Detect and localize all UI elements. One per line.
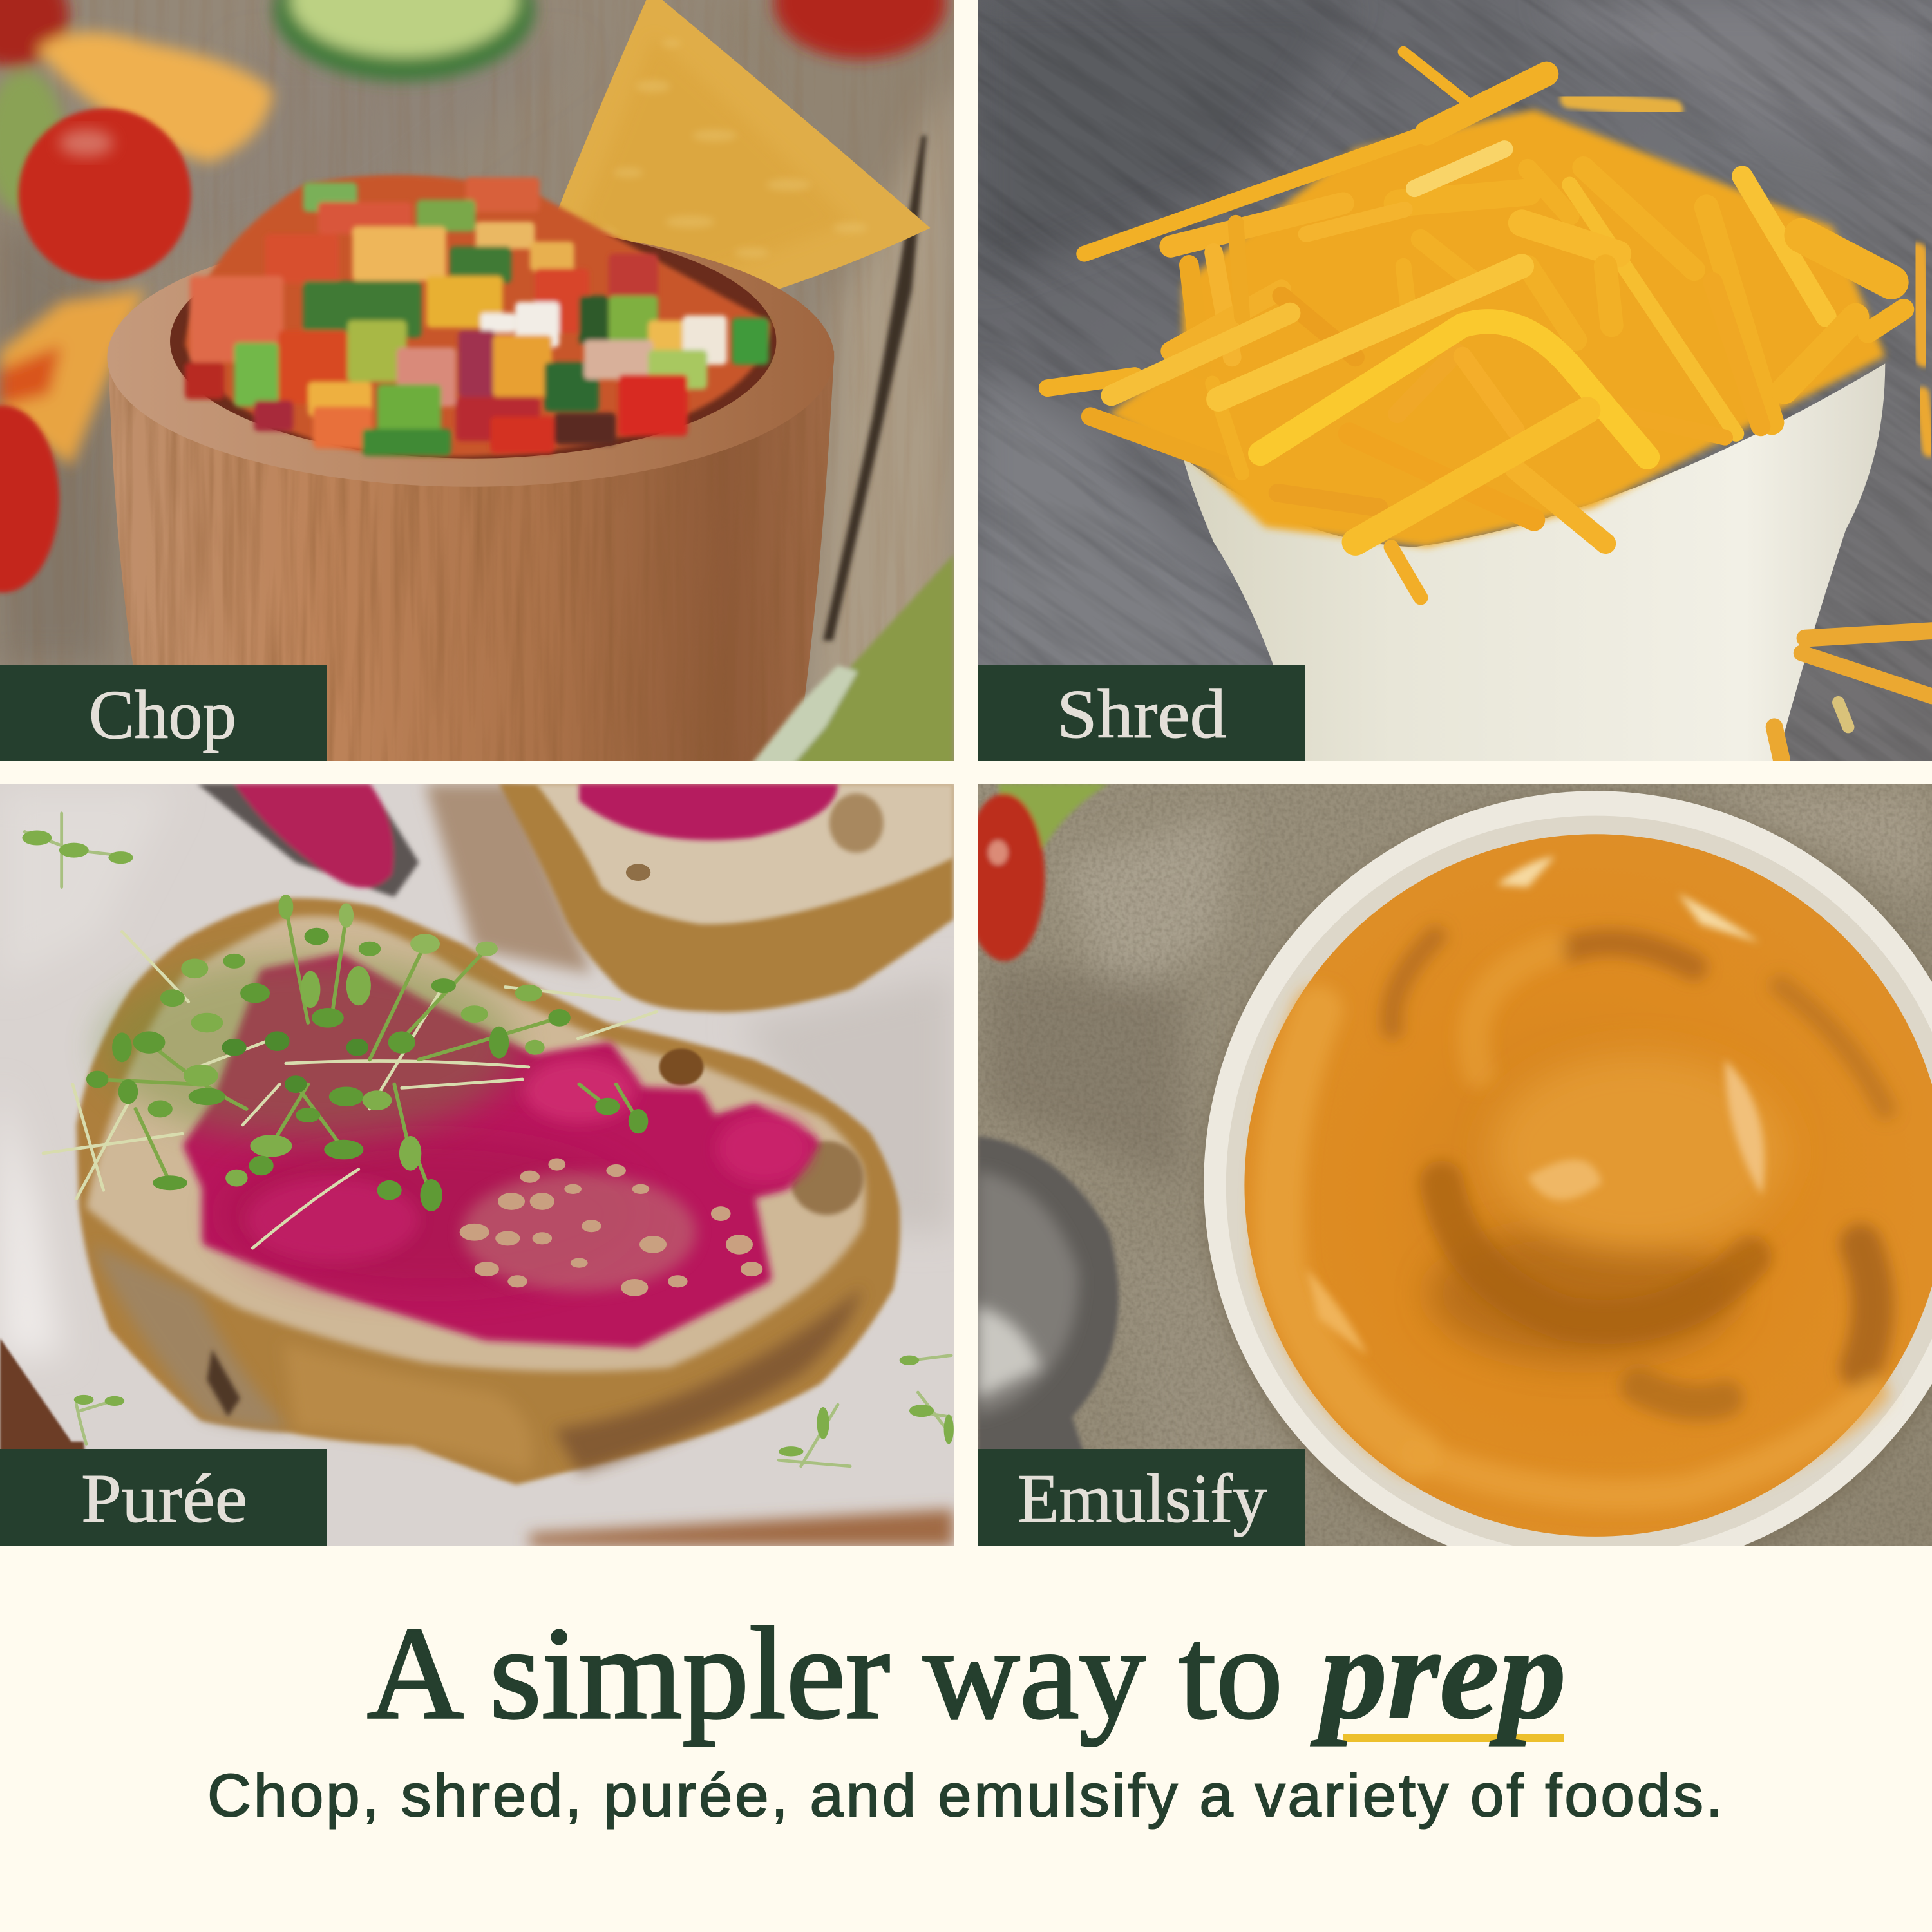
- panel: emulsify photo, orange sauce in white bowl: [963, 784, 1932, 1582]
- label: Chop: Chop: [89, 677, 236, 753]
- panel: chop photo, salsa in wooden bowl: [0, 0, 954, 770]
- microgreen sprouts: [43, 895, 657, 1248]
- icon: spoon with beet: [197, 784, 419, 897]
- label: Chop: [0, 665, 327, 761]
- panel: shred photo, cheddar in white cup: [444, 0, 1932, 1414]
- icon: lettuce: [746, 554, 954, 770]
- title: A simpler way to prep: A simpler way to: [367, 1600, 1283, 1747]
- sauce with swirls: [1244, 834, 1932, 1537]
- shredded cheese pile: [1047, 52, 1904, 598]
- icon: tortilla chip: [558, 0, 930, 289]
- icon: wooden bowl: [99, 224, 850, 770]
- label: Shred: Shred: [1057, 676, 1226, 753]
- salsa chunks: [185, 175, 772, 457]
- icon: background produce: [0, 0, 946, 466]
- label: Emulsify: Emulsify: [1018, 1461, 1267, 1537]
- label: Shred: [978, 665, 1305, 761]
- icon: background toast: [499, 784, 954, 1012]
- crumbs topping: [460, 1158, 762, 1296]
- icon: scattered cheese shreds: [1774, 252, 1932, 760]
- beet spread: [191, 961, 811, 1341]
- title: A simpler way to prep: prep: [1311, 1600, 1566, 1747]
- icon: white bowl: [1201, 791, 1932, 1582]
- label: Purée: Purée: [81, 1461, 247, 1537]
- label: Purée: [0, 1449, 327, 1546]
- subtitle: Chop, shred, purée, and emulsify a variety of foods.: [207, 1761, 1723, 1829]
- icon: cherry tomato with leaf: [963, 784, 1109, 961]
- wooden board: [425, 784, 954, 1546]
- panel: puree photo, beet spread on toast: [0, 784, 955, 1546]
- icon: metal spoon: [977, 1136, 1119, 1454]
- icon: white cup: [1183, 363, 1885, 770]
- label: Emulsify: [978, 1449, 1305, 1546]
- icon: loose sprouts: [22, 813, 954, 1466]
- icon: main toast crust: [77, 898, 900, 1484]
